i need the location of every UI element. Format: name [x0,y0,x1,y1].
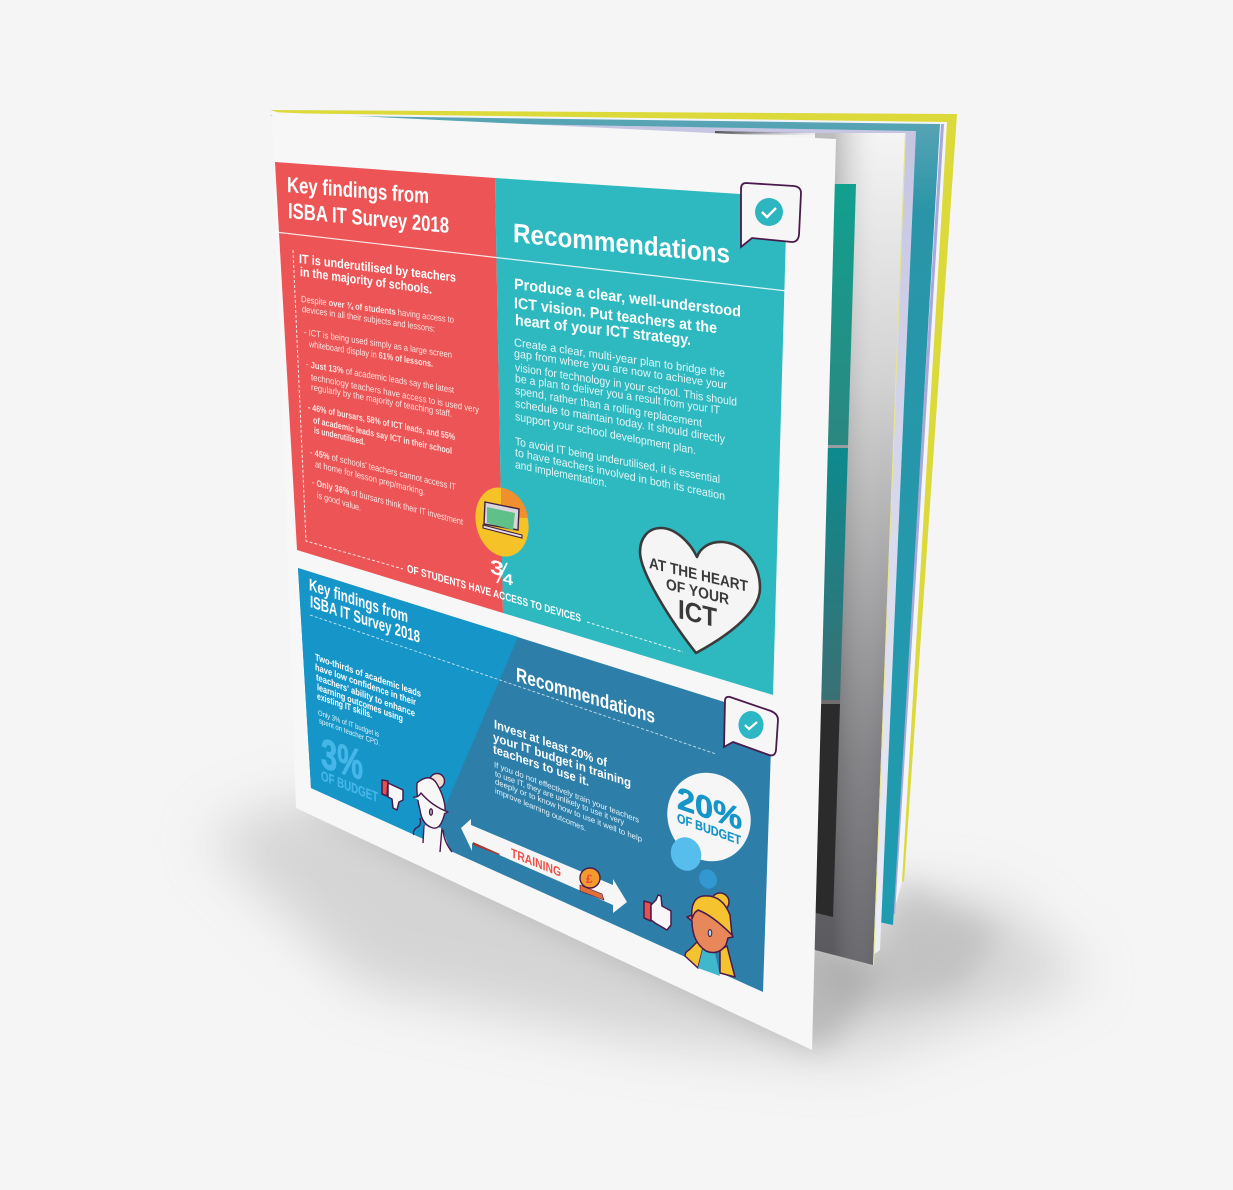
body text: training: If you do not effectively train your teachers [494,759,639,825]
body text: to have teachers involved in both its creation [515,446,725,503]
body text list: at home for lesson prep/marking. [315,459,425,497]
icon: laptop in pie chart [468,482,536,562]
callout: 20 percent thought bubble [653,759,765,892]
body text: Create a clear, multi-year plan to bridge the [514,337,725,380]
body text list: devices in all their subjects and lessons: [302,304,435,334]
body text: be a plan to deliver you a result from your IT [515,373,720,417]
panel: blue key findings [298,568,772,992]
arrow: training balance [461,819,627,913]
title: key findings [287,172,449,238]
text: academic leads finding: existing IT skills. [317,691,372,721]
callout: 20 percent thought bubble: OF BUDGET [677,810,742,848]
body text: spend, rather than a rolling replacement [515,385,703,430]
ground shadow [205,800,1090,1060]
text: CPD budget: Only 3% of IT budget is [318,708,379,739]
text: academic leads finding: have low confidence in their [315,662,416,708]
booklet back pages [270,110,957,965]
heart text: ICT [678,593,717,633]
body text: training: deeply or to know how to use it well to help [495,776,642,844]
character: teacher with low confidence [413,774,452,856]
icon: pound coin: £ [586,872,593,886]
body text: training: to use IT, they are unlikely to use it very [495,769,625,827]
stat: three quarters of students [407,556,581,625]
teal inner page [270,115,940,925]
body text: To avoid IT being underutilised, it is essential [515,436,720,486]
icon: speech bubble tick top [741,183,801,247]
icon: ruler [473,842,500,855]
inner page dark teal band [815,448,848,700]
body text list: - ICT is being used simply as a large screen [304,327,452,360]
stat: 3 percent of budget: OF BUDGET [321,768,378,806]
subheading: in the majority of schools. [300,264,432,297]
body text: training: improve learning outcomes. [495,785,586,833]
stat: three quarters of students: 4 [503,570,514,590]
heart text: OF YOUR [666,576,730,609]
body text: support your school development plan. [515,410,696,457]
body text list: is good value. [317,489,361,513]
inner white page stack [270,113,947,914]
title: key findings: Key findings from [287,172,429,208]
subheading: invest in training: your IT budget in training [493,729,631,790]
dashed divider on blue panel [310,615,716,754]
heart text [649,555,748,633]
subheading: invest in training: teachers to use it. [493,741,589,789]
icon: speech bubble tick lower [724,697,778,755]
title: key findings: ISBA IT Survey 2018 [288,198,449,238]
lavender page line [892,124,944,914]
text: academic leads finding [315,652,421,725]
grey inner page [720,133,905,965]
icon: thumb down [382,780,403,810]
body text list [301,294,479,527]
body text: vision for technology in your school. This should [515,362,737,409]
character: confident teacher [685,893,735,977]
body text: and implementation. [515,458,607,490]
body text list: - Only 36% of bursars think their IT investment [312,477,463,527]
inner page dark band [812,704,840,917]
dashed dividers on the red and teal panels [293,250,683,652]
stat: 3 percent of budget: 3% [321,730,363,790]
heading: recommendations: Recommendations [513,218,730,269]
subheading: IT is underutilised by teachers [299,251,456,285]
body text list: - Just 13% of academic leads say the latest [306,359,454,395]
heart text: AT THE HEART [649,555,748,596]
front cover page [272,112,836,1050]
text: academic leads finding: learning outcomes using [317,682,403,725]
text: academic leads finding: Two-thirds of academic leads [315,652,421,700]
body text list: technology teachers have access to is used very [311,372,479,415]
text: CPD budget: spent on teacher CPD. [319,716,380,748]
subheading: invest in training: Invest at least 20% of [494,716,608,770]
subheading: Produce a clear, well-understood [514,276,741,321]
body text list: is underutilised. [314,425,365,447]
stat: three quarters of students: OF STUDENTS HAVE ACCESS TO DEVICES [407,563,581,625]
text: academic leads finding: teachers' ability to enhance [316,672,415,720]
body text list: - 46% of bursars, 58% of ICT leads, and 55% [308,402,455,442]
heading: blue recommendations: Recommendations [516,663,655,728]
panel: teal recommendations [495,178,787,695]
subheading [514,276,741,349]
label: training: TRAINING [511,845,561,880]
icon: pound coin [580,868,604,900]
callout: 20 percent thought bubble: 20% [677,780,742,837]
title: blue key findings: Key findings from [309,574,408,627]
body text [514,337,737,503]
title: blue key findings: ISBA IT Survey 2018 [310,591,420,647]
lavender page [290,120,916,955]
body text list: of academic leads say ICT in their school [313,415,452,456]
body text: gap from where you are now to achieve your [514,348,727,392]
subheading: heart of your ICT strategy. [515,312,691,349]
stat: three quarters of students: 3 [490,556,504,581]
subheading: ICT vision. Put teachers at the [514,295,717,337]
body text list: regularly by the majority of teaching staff. [311,382,452,419]
body text list: - 45% of schools' teachers cannot access IT [310,447,456,492]
body text list: whiteboard display in 61% of lessons. [308,339,433,369]
icon: thumb up [644,895,671,930]
body text list: Despite over ¾ of students having access to [301,294,454,325]
icon: heart callout [640,528,760,653]
panel: red key findings [275,162,503,613]
back cover: yellow edge [270,110,957,882]
body text: schedule to maintain today. It should directly [515,398,725,446]
inner page teal band [815,184,856,445]
